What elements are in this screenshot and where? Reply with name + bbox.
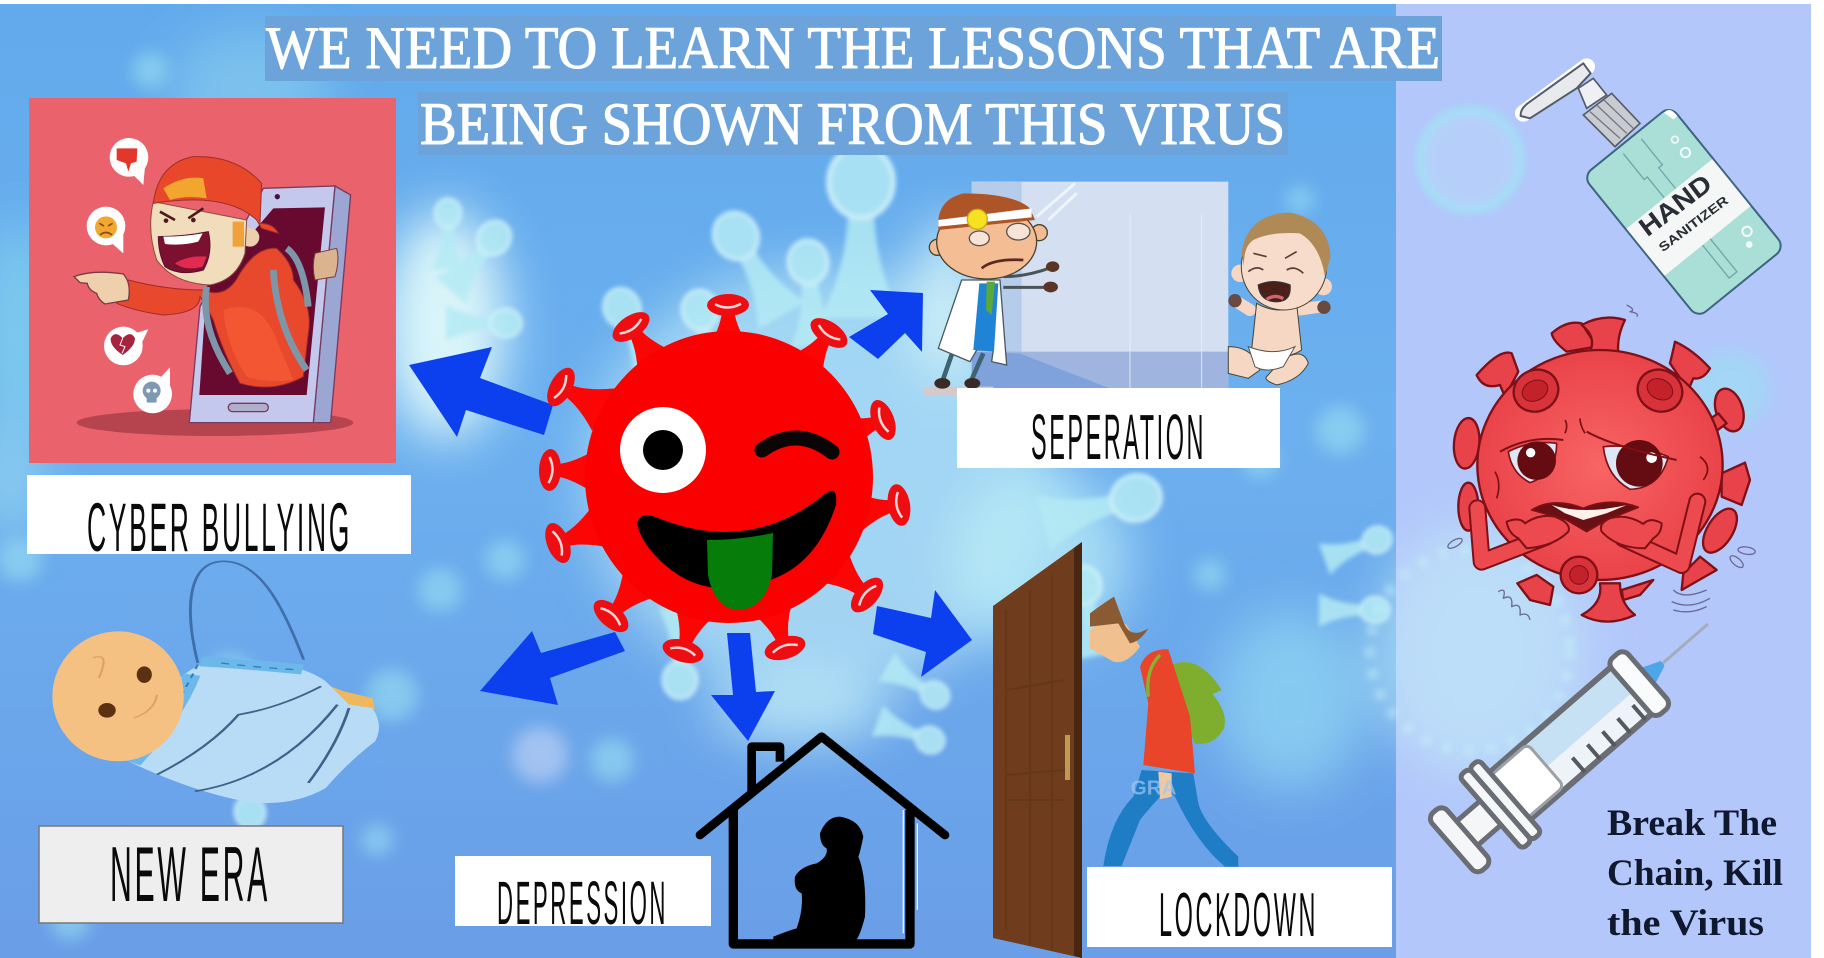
sanitizer label text: HAND	[1633, 168, 1718, 242]
arrow: right to lockdown	[873, 590, 972, 677]
title	[266, 15, 1440, 157]
icon: sad man with backpack	[1090, 597, 1238, 867]
hands	[74, 272, 129, 304]
hoodie and arm	[117, 248, 309, 387]
head	[241, 228, 259, 247]
sanitizer label text	[1633, 168, 1731, 255]
rings	[1507, 362, 1689, 593]
label: depression	[455, 856, 711, 937]
arrow: up-left to cyber bullying	[409, 347, 553, 437]
icon: sad man with backpack: GRA	[1131, 777, 1177, 800]
icon: hand sanitizer bottle	[1521, 63, 1785, 318]
label: cyber bullying	[27, 475, 411, 566]
body	[585, 331, 873, 623]
sweat and shiver marks	[1446, 305, 1756, 620]
cap	[153, 157, 278, 233]
backpack straps	[205, 248, 308, 373]
open eye	[620, 407, 706, 493]
icon: door	[993, 542, 1082, 958]
phone	[189, 186, 351, 423]
title: WE NEED TO LEARN THE LESSONS THAT ARE	[266, 15, 1440, 81]
title band line 1	[265, 16, 1442, 81]
eyes	[160, 208, 203, 220]
label: seperation: SEPERATION	[1031, 401, 1206, 473]
title: BEING SHOWN FROM THIS VIRUS	[420, 91, 1285, 157]
label: new era	[39, 826, 343, 923]
arrow: up-right to separation	[849, 290, 923, 359]
label: seperation	[957, 388, 1280, 473]
label: new era: NEW ERA	[110, 830, 270, 918]
text: DEPRESSION	[497, 869, 668, 937]
icon: worried red virus	[1446, 305, 1756, 622]
winking eye	[762, 438, 832, 452]
text: break the chain: the Virus	[1607, 903, 1764, 944]
arrow: down to depression	[711, 633, 775, 741]
background: lavender side panel	[1396, 4, 1811, 958]
icon: syringe	[1421, 588, 1739, 883]
label: lockdown	[1087, 867, 1392, 950]
icon: doctor	[923, 193, 1059, 396]
panel: cyber bullying illustration	[29, 98, 396, 463]
main red virus	[538, 294, 914, 668]
eyes	[1508, 443, 1557, 483]
icon: baby mask	[52, 561, 379, 803]
speech bubbles	[87, 138, 172, 413]
seated person	[773, 817, 865, 942]
text: break the chain: Chain, Kill	[1607, 853, 1783, 894]
background: blue panel	[0, 4, 1396, 958]
icon: crying baby	[1228, 213, 1332, 385]
text: break the chain: Break The	[1607, 803, 1777, 844]
shadow	[77, 409, 353, 436]
title band line 2	[418, 92, 1288, 155]
sanitizer label text: SANITIZER	[1656, 193, 1731, 255]
body	[1477, 350, 1723, 580]
teeth	[1532, 502, 1638, 532]
mouth	[158, 232, 210, 273]
arrow: down-left to new era	[480, 631, 625, 705]
label: lockdown: LOCKDOWN	[1159, 881, 1318, 950]
arms	[1477, 502, 1697, 565]
spikes	[1452, 318, 1750, 622]
text: CYBER BULLYING	[87, 489, 352, 566]
tongue	[707, 533, 773, 610]
mouth	[637, 491, 836, 589]
spikes	[538, 294, 914, 668]
text: break the chain	[1607, 803, 1783, 944]
hands	[1507, 516, 1569, 548]
icon: glass panel	[972, 182, 1228, 388]
icon: house with seated person	[700, 737, 945, 944]
